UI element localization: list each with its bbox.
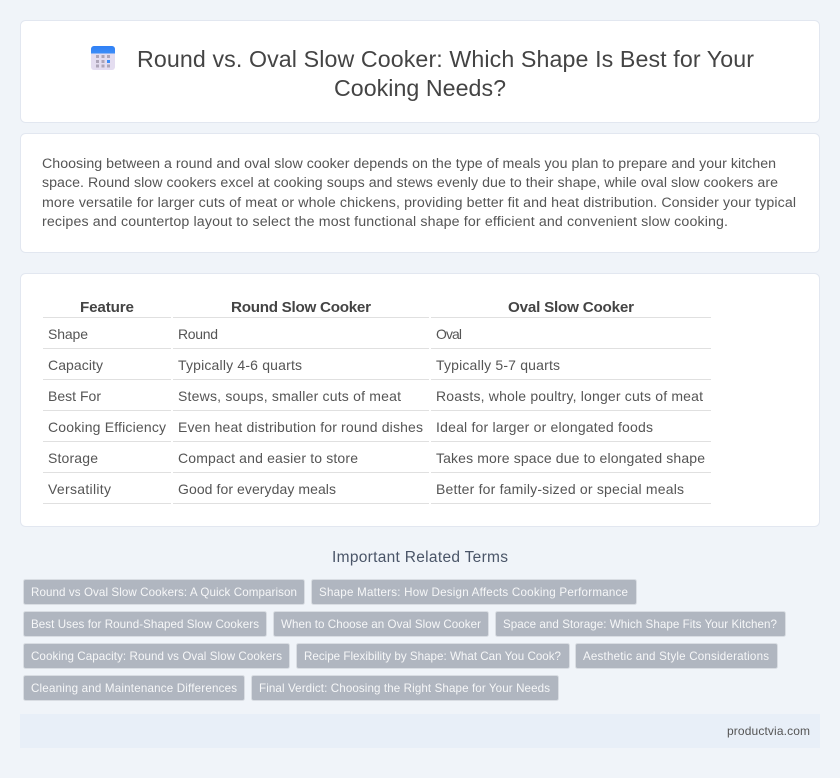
text block: introduction: [42, 156, 796, 230]
title: Round vs. Oval Slow Cooker: Which Shape Is Best for Your: [137, 46, 754, 72]
table header: Feature: [80, 299, 134, 316]
table header: Oval Slow Cooker: [508, 299, 634, 316]
icon: calendar: [91, 46, 115, 70]
table row: storage: Compact and easier to store: [178, 450, 358, 466]
table row: capacity: Typically 4-6 quarts: [178, 357, 302, 373]
related term tags: [24, 580, 786, 700]
table row: versatility: Better for family-sized or special meals: [436, 481, 684, 497]
related term tags: Final Verdict: Choosing the Right Shape for Your Needs: [259, 682, 550, 695]
table row: cooking efficiency: Even heat distribution for round dishes: [178, 419, 423, 435]
panel: comparison table: [20, 274, 820, 526]
table row: versatility: Versatility: [48, 481, 111, 497]
related term tags: Space and Storage: Which Shape Fits Your Kitchen?: [503, 618, 778, 631]
table row: capacity: [48, 357, 560, 373]
table row: shape: [48, 326, 462, 342]
title: [137, 46, 754, 101]
panel: introduction: [20, 134, 820, 252]
related term tags: Aesthetic and Style Considerations: [583, 650, 769, 663]
heading: related terms: Important Related Terms: [332, 549, 508, 566]
table row: best for: [48, 388, 703, 404]
table row: cooking efficiency: Ideal for larger or elongated foods: [436, 419, 653, 435]
table row: capacity: Capacity: [48, 357, 103, 373]
text block: introduction: recipes and countertop layout to select the most functional shape for efficient and convenient slow cooking.: [42, 214, 728, 230]
table row: best for: Stews, soups, smaller cuts of meat: [178, 388, 401, 404]
table row: versatility: [48, 481, 684, 497]
panel: header: [20, 20, 820, 122]
related term tags: Cleaning and Maintenance Differences: [31, 682, 237, 695]
table row: storage: Storage: [48, 450, 98, 466]
table header: Round Slow Cooker: [231, 299, 371, 316]
text block: introduction: more versatile for larger cuts of meat or whole chickens, providing better fit and heat distribution. Consider your typical: [42, 195, 796, 211]
related term tags: When to Choose an Oval Slow Cooker: [281, 618, 481, 631]
table row: best for: Roasts, whole poultry, longer cuts of meat: [436, 388, 703, 404]
table row: best for: Best For: [48, 388, 101, 404]
table row: shape: Oval: [436, 326, 462, 342]
text block: introduction: Choosing between a round and oval slow cooker depends on the type of meals you plan to prepare and your kitchen: [42, 156, 776, 172]
related term tags: Round vs Oval Slow Cookers: A Quick Comparison: [31, 586, 297, 599]
footer: [20, 714, 820, 748]
related term tags: Shape Matters: How Design Affects Cooking Performance: [319, 586, 628, 599]
table header: [80, 299, 634, 316]
footer: productvia.com: [727, 724, 810, 738]
related term tags: Recipe Flexibility by Shape: What Can You Cook?: [304, 650, 562, 663]
table row: capacity: Typically 5-7 quarts: [436, 357, 560, 373]
table row: storage: Takes more space due to elongated shape: [436, 450, 705, 466]
text block: introduction: space. Round slow cookers excel at cooking soups and stews evenly due to their shape, while oval slow cookers are: [42, 175, 778, 191]
related term tags: Best Uses for Round-Shaped Slow Cookers: [31, 618, 259, 631]
table row: shape: Round: [178, 326, 218, 342]
table row: cooking efficiency: [48, 419, 653, 435]
table row: storage: [48, 450, 705, 466]
related term tags: Cooking Capacity: Round vs Oval Slow Cookers: [31, 650, 282, 663]
table row: versatility: Good for everyday meals: [178, 481, 336, 497]
table row: shape: Shape: [48, 326, 88, 342]
title: Cooking Needs?: [334, 75, 506, 101]
table row: cooking efficiency: Cooking Efficiency: [48, 419, 166, 435]
